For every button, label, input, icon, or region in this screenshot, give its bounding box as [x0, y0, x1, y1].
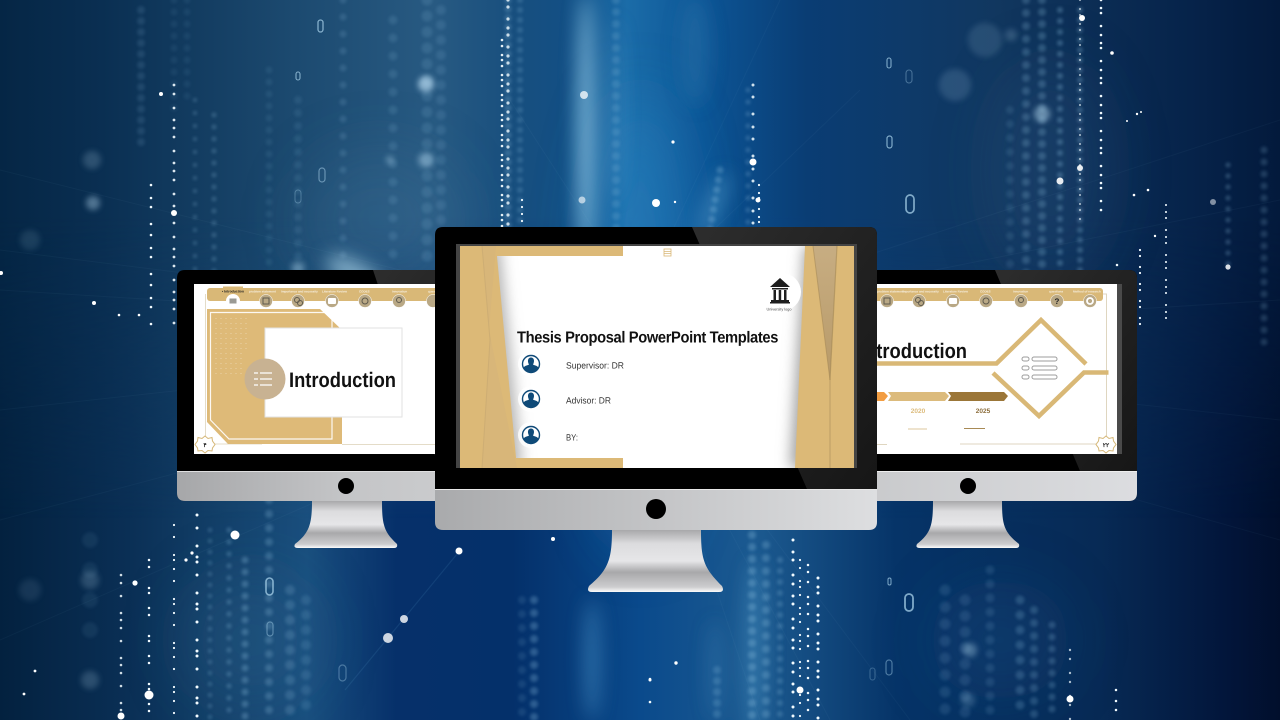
right curtain panel [795, 246, 854, 468]
small top icon [664, 249, 671, 256]
list icon disc [244, 358, 286, 400]
monitor frame centre [435, 227, 877, 489]
monitor: right (Introduction timeline slide) [877, 270, 1137, 548]
university logo [766, 277, 801, 312]
year labels: 2020 [911, 408, 926, 415]
person row: supervisor [518, 354, 624, 374]
panel shadows [497, 246, 805, 468]
navigation bar: Importance and necessity [902, 290, 939, 294]
slide title: Thesis Proposal PowerPoint Templates [517, 330, 778, 346]
slide frame lines [877, 294, 1106, 444]
soft glow particles [19, 23, 1050, 707]
soft light clouds [180, 60, 1110, 710]
monitor chin left [177, 471, 515, 501]
navigation bar: problem statement [877, 290, 904, 294]
camera dot right [960, 478, 976, 494]
navigation bar: Innovation [1013, 290, 1028, 294]
list pills [1022, 357, 1057, 379]
slide screen right [860, 284, 1117, 454]
navigation bar: Importance and necessity [281, 290, 318, 294]
slide frame lines [206, 294, 440, 444]
slide screen left [194, 284, 447, 454]
monitor chin right [799, 471, 1137, 501]
person row: by: BY: [566, 432, 578, 442]
person row: advisor [518, 390, 610, 409]
navigation bar: problem statement [249, 290, 276, 294]
monitor: left (Introduction section slide) [177, 270, 435, 548]
year underlines [908, 428, 985, 430]
navigation bar: Literature Review [943, 290, 969, 294]
navigation bar [860, 288, 1103, 308]
slide screen right: 2025 [976, 408, 991, 415]
navigation bar: questions [1049, 290, 1063, 294]
diamond graphic [870, 320, 1108, 416]
navigation bar [207, 286, 447, 308]
navigation bar: • Introduction [222, 290, 244, 294]
university logo: University logo [767, 308, 791, 312]
monitor stand left [294, 501, 397, 548]
navigation bar: Literature Review [322, 290, 348, 294]
title card [265, 328, 402, 417]
left curtain panel [460, 246, 517, 468]
monitor: centre (thesis title slide) [435, 227, 877, 592]
person row: by [518, 424, 578, 447]
heading: Introduction: Introduction [860, 340, 967, 363]
heading: Introduction: Introduction [289, 369, 396, 392]
camera dot centre [646, 499, 666, 519]
navigation bar: Innovation [392, 290, 407, 294]
monitor frame left [177, 270, 515, 501]
monitor stand right [916, 501, 1019, 548]
top and bottom tan bars [490, 246, 623, 468]
tan title panel [207, 309, 342, 444]
navigation bar: CODES [980, 290, 991, 294]
page badge right [1096, 436, 1116, 453]
navigation bar: Method of research [1073, 290, 1101, 294]
navigation bar: ? [1055, 297, 1060, 306]
camera dot left [338, 478, 354, 494]
timeline arrows [870, 392, 1008, 401]
dot pattern [216, 318, 246, 375]
page badge left: ۴ [203, 443, 207, 449]
monitor frame right [799, 270, 1137, 501]
navigation bar: questions [428, 290, 442, 294]
person row: advisor: Advisor: DR [566, 396, 611, 406]
page badge right: ۲۲ [1103, 443, 1110, 449]
person row: supervisor: Supervisor: DR [566, 360, 624, 370]
monitor stand centre [588, 530, 723, 592]
blue streak lower centre [345, 548, 462, 690]
page badge left [195, 436, 215, 453]
monitor chin centre [435, 489, 877, 530]
binary zero glyphs [266, 20, 914, 681]
navigation bar: CODES [359, 290, 370, 294]
slide screen centre [460, 246, 854, 468]
